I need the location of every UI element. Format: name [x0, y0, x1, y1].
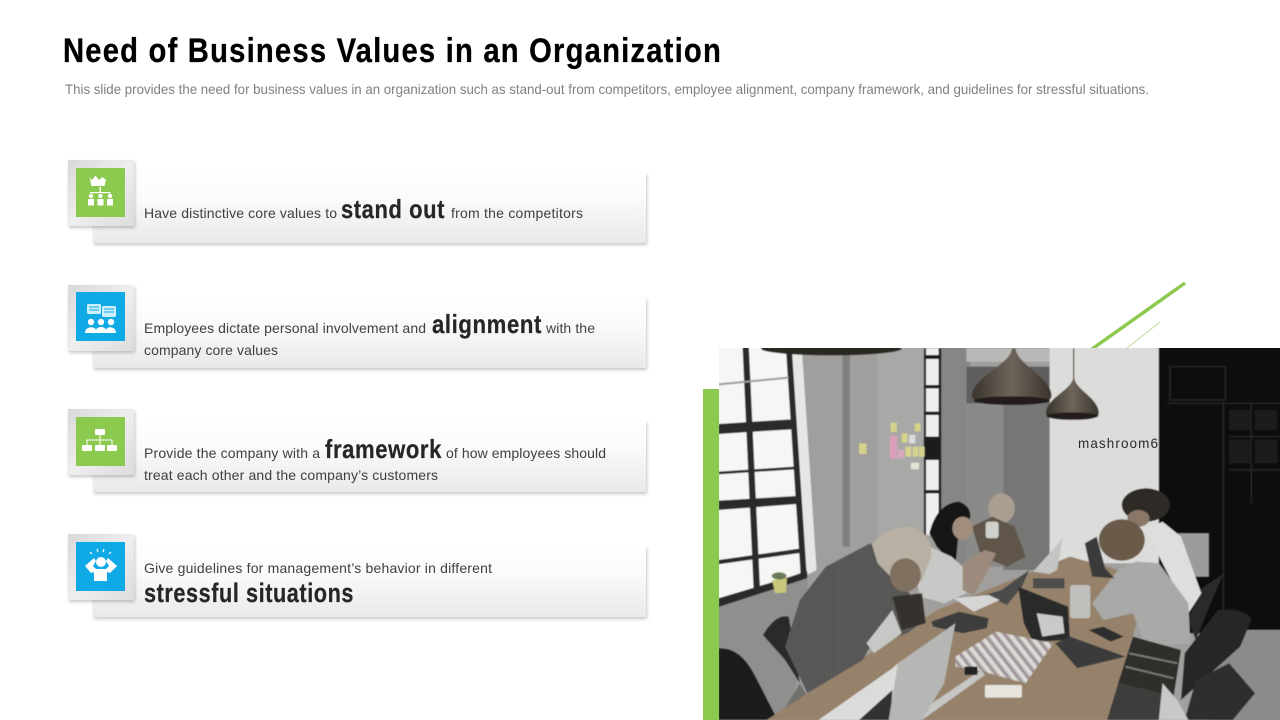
- text: card 3: framework: [325, 434, 442, 464]
- text: card 1: Have distinctive core values to: [144, 205, 337, 221]
- laptops: [985, 537, 1114, 605]
- woman in white shirt: [1122, 488, 1201, 613]
- title: Need of Business Values in an Organization: [63, 32, 722, 70]
- text: card 1: stand out: [341, 194, 445, 224]
- left window: [715, 347, 807, 607]
- foreground laptop: [818, 623, 955, 720]
- text: card 4: [144, 560, 492, 608]
- bags: [1159, 683, 1188, 720]
- photo: team meeting around a table: [715, 342, 1280, 720]
- notebooks and phones: [931, 578, 1124, 698]
- text: card 1: [144, 194, 583, 224]
- card background 4: [93, 546, 646, 617]
- text: card 2: company core values: [144, 342, 278, 358]
- text: card 2: [144, 309, 595, 358]
- text: card 4: stressful situations: [144, 578, 354, 608]
- text: card 1: from the competitors: [451, 205, 583, 221]
- icon: crown hierarchy: [68, 160, 134, 226]
- woman in grey sweater: [1092, 519, 1190, 697]
- wall sign: mashroom6: [1078, 436, 1158, 451]
- text: card 2: Employees dictate personal involvement and: [144, 320, 426, 336]
- panel: alignment: [68, 285, 646, 368]
- panel: stressful situations: [68, 534, 646, 617]
- icon: stressed person: [68, 534, 134, 600]
- text: card 3: Provide the company with a: [144, 445, 320, 461]
- text: card 2: with the: [545, 320, 595, 336]
- man in checked shirt: [785, 527, 931, 693]
- walls: [719, 348, 1211, 720]
- text: card 3: of how employees should: [446, 445, 606, 461]
- icon: people talking: [68, 285, 134, 351]
- table: [767, 557, 1137, 720]
- accent: diagonal green lines: [1092, 283, 1185, 349]
- panel: stand out: [68, 160, 646, 243]
- dark laptop with stickers: [1018, 587, 1126, 668]
- card background 3: [93, 421, 646, 492]
- chairs: [763, 616, 800, 683]
- ceiling lamps: [760, 348, 902, 356]
- second window: [924, 348, 940, 535]
- text: card 2: alignment: [432, 309, 542, 339]
- subtitle: This slide provides the need for business values in an organization such as stand-out from competitors, employee alignment, company framework, and guidelines for stressful situations.: [65, 81, 1149, 97]
- sticky notes: [859, 423, 925, 457]
- text: card 3: treat each other and the company’s customers: [144, 467, 438, 483]
- text: card 3: [144, 434, 606, 483]
- card background 1: [93, 172, 646, 243]
- text: card 4: Give guidelines for management’s behavior in different: [144, 560, 492, 576]
- plant pot: [772, 572, 787, 593]
- woman with dark hair: [916, 502, 996, 603]
- panel: framework: [68, 409, 646, 492]
- card background 2: [93, 297, 646, 368]
- icon: org chart: [68, 409, 134, 475]
- accent: vertical green bar: [703, 389, 719, 720]
- bald man: [972, 493, 1026, 567]
